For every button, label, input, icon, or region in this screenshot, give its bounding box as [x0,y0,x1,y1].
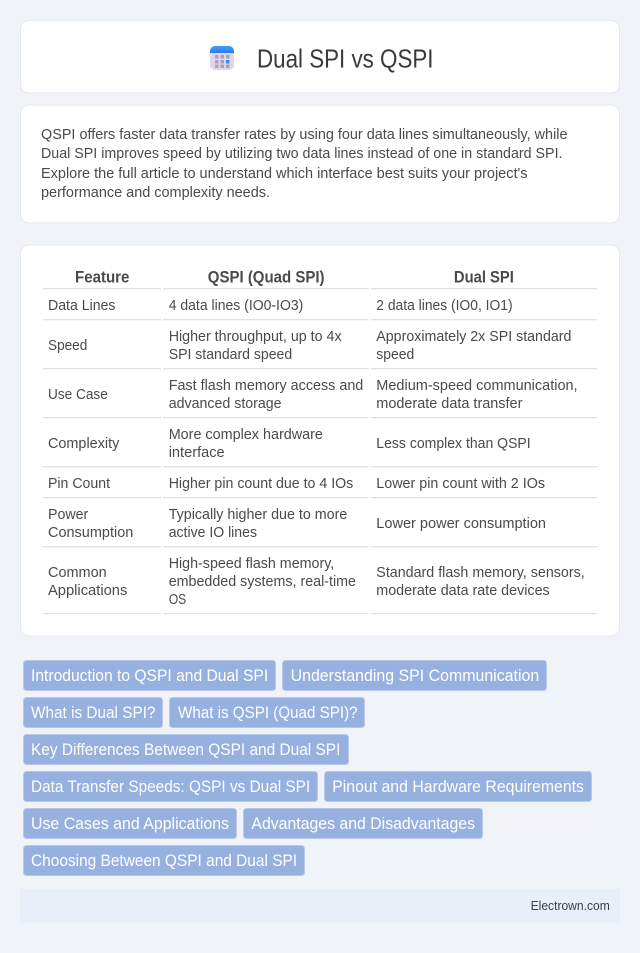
row: speed: speed [376,346,414,363]
row: use case: Use Case [48,386,108,403]
panel: title card [20,20,620,93]
row: power consumption: Power [48,506,88,523]
row: power consumption: Lower power consumption [376,515,546,532]
row: speed: Higher throughput, up to 4x [169,328,342,345]
row: speed [48,328,571,363]
row: speed: SPI standard speed [169,346,292,363]
row: complexity [48,426,531,461]
row: common applications [48,555,585,608]
tag: advantages: Advantages and Disadvantages [251,814,475,833]
row: complexity: interface [169,444,225,461]
tag: understanding SPI [282,660,546,690]
panel: comparison table card [20,245,620,636]
summary text: QSPI offers faster data transfer rates by using four data lines simultaneously, while [41,126,568,143]
tag: introduction: Introduction to QSPI and Dual SPI [31,666,268,685]
title: Dual SPI vs QSPI [257,44,434,74]
footer credit: Electrown.com [531,898,610,913]
row: common applications: OS [169,591,186,608]
table header row: Dual SPI [454,268,514,286]
row: complexity: More complex hardware [169,426,323,443]
icon: calendar [210,46,234,70]
row: use case: Fast flash memory access and [169,377,363,394]
row: common applications: embedded systems, real-time [169,573,356,590]
row: common applications: Common [48,564,107,581]
row: pin count [48,475,545,492]
summary text [41,126,568,201]
table header row: Feature [75,268,129,286]
row: speed: Approximately 2x SPI standard [376,328,571,345]
row: use case: advanced storage [169,395,282,412]
tag: advantages [244,808,482,838]
tag: what is QSPI [170,698,364,728]
row: use case: Medium-speed communication, [376,377,578,394]
summary text: performance and complexity needs. [41,184,270,201]
table header row [75,268,514,286]
row: use case [48,377,578,412]
table: comparison [43,268,597,614]
tag: understanding SPI: Understanding SPI Communication [291,666,539,685]
row: pin count: Higher pin count due to 4 IOs [169,475,353,492]
row: data lines: 4 data lines (IO0-IO3) [169,297,303,314]
row: power consumption [48,506,546,541]
row: data lines: Data Lines [48,297,116,314]
tag: pinout [324,772,592,802]
panel: summary card [20,105,620,223]
tag: what is QSPI: What is QSPI (Quad SPI)? [178,703,358,722]
row: power consumption: active IO lines [169,524,257,541]
row: power consumption: Consumption [48,524,133,541]
tag: use cases: Use Cases and Applications [31,814,229,833]
tag: what is dual SPI: What is Dual SPI? [31,703,156,722]
row: use case: moderate data transfer [376,395,522,412]
tag: introduction [24,660,276,690]
topic tags [24,660,592,876]
tag: data transfer speeds [24,772,318,802]
tag: choosing [24,846,304,876]
row: data lines: 2 data lines (IO0, IO1) [376,297,513,314]
row: complexity: Less complex than QSPI [376,435,531,452]
row: data lines [48,297,513,314]
row: pin count: Lower pin count with 2 IOs [376,475,545,492]
row: power consumption: Typically higher due to more [169,506,347,523]
tag: key differences: Key Differences Between QSPI and Dual SPI [31,740,340,759]
row: common applications: Applications [48,582,127,599]
summary text: Explore the full article to understand which interface best suits your project's [41,165,528,182]
summary text: Dual SPI improves speed by utilizing two data lines instead of one in standard SPI. [41,145,562,162]
row: complexity: Complexity [48,435,120,452]
tag: what is dual SPI [24,698,162,728]
row: common applications: moderate data rate devices [376,582,550,599]
table header row: QSPI (Quad SPI) [208,268,324,286]
tag: key differences [24,734,348,764]
row: common applications: High-speed flash memory, [169,555,334,572]
tag: pinout: Pinout and Hardware Requirements [332,777,584,796]
footer [20,889,620,923]
row: common applications: Standard flash memory, sensors, [376,564,585,581]
tag: choosing: Choosing Between QSPI and Dual SPI [31,851,297,870]
row: pin count: Pin Count [48,475,111,492]
row: speed: Speed [48,337,87,354]
tag: data transfer speeds: Data Transfer Speeds: QSPI vs Dual SPI [31,777,310,796]
tag: use cases [24,808,236,838]
